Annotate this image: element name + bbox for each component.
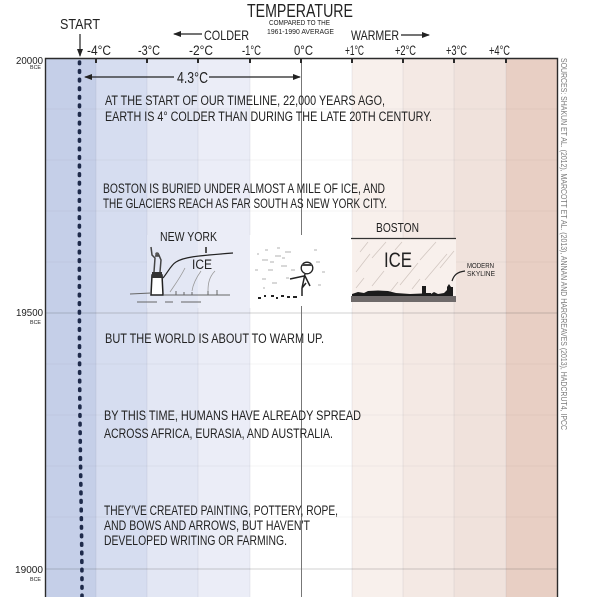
icon: statue of liberty xyxy=(151,247,163,295)
colder label with arrow: COLDER xyxy=(204,27,249,43)
start label with arrow xyxy=(60,16,100,56)
illustration: boston under ice: BOSTON xyxy=(376,220,419,235)
year axis labels: BCE xyxy=(30,320,41,326)
temperature axis labels: +1°C xyxy=(345,43,364,58)
skyline callout: SKYLINE xyxy=(467,269,495,278)
text block: start of timeline: AT THE START OF OUR TIMELINE, 22,000 YEARS AGO, xyxy=(105,93,385,108)
illustration: new york under ice xyxy=(130,229,233,302)
text block: human spread: ACROSS AFRICA, EURASIA, AND AUSTRALIA. xyxy=(104,426,333,441)
sources note: SOURCES: SHAKUN ET AL. (2012), MARCOTT ET AL. (2013), ANNAN AND HARGREAVES (2013), HADCRUT4, IPCC xyxy=(559,58,568,430)
subtitle: 1961-1990 AVERAGE xyxy=(267,29,334,36)
text block: start of timeline: EARTH IS 4° COLDER THAN DURING THE LATE 20TH CENTURY. xyxy=(105,109,432,124)
text block: boston under ice xyxy=(103,181,387,211)
illustration: new york under ice: ICE xyxy=(192,257,212,272)
text block: warming begins: BUT THE WORLD IS ABOUT TO WARM UP. xyxy=(105,331,324,346)
year axis labels: 19000 xyxy=(15,564,43,576)
panel: frame and ticks xyxy=(46,58,558,597)
year axis labels: 20000 xyxy=(16,55,43,67)
title: TEMPERATURE xyxy=(247,1,353,21)
skyline callout: MODERN xyxy=(467,261,494,270)
temperature axis labels: -2°C xyxy=(189,43,213,58)
skyline callout xyxy=(452,261,495,281)
text block: human inventions: DEVELOPED WRITING OR FARMING. xyxy=(104,533,287,548)
illustration: figure walking in snow xyxy=(255,248,325,298)
temperature axis labels: +2°C xyxy=(395,43,416,58)
temperature axis labels: -1°C xyxy=(242,43,261,58)
illustration: boston under ice: ICE xyxy=(384,249,412,272)
year axis labels xyxy=(15,55,43,583)
illustration: new york under ice: NEW YORK xyxy=(160,229,217,244)
temperature axis labels xyxy=(87,43,510,58)
year axis labels: BCE xyxy=(30,65,41,71)
illustration: boston under ice xyxy=(351,220,495,302)
dotted temperature line xyxy=(79,62,82,597)
text block: boston under ice: BOSTON IS BURIED UNDER ALMOST A MILE OF ICE, AND xyxy=(103,181,385,196)
year axis labels: BCE xyxy=(30,577,41,583)
temperature axis labels: +4°C xyxy=(489,43,510,58)
subtitle: COMPARED TO THE xyxy=(269,20,330,27)
temperature axis labels: -3°C xyxy=(138,43,160,58)
colder label with arrow xyxy=(174,27,249,43)
temperature axis labels: -4°C xyxy=(87,43,111,58)
text block: human inventions xyxy=(104,503,338,548)
warmer label with arrow: WARMER xyxy=(351,27,399,43)
panel: temperature columns xyxy=(45,58,557,597)
temperature axis labels: 0°C xyxy=(294,43,313,58)
text block: human spread: BY THIS TIME, HUMANS HAVE ALREADY SPREAD xyxy=(104,408,361,423)
text block: start of timeline xyxy=(105,93,432,124)
skyline ground band xyxy=(351,296,456,302)
text block: human spread xyxy=(104,408,361,441)
year axis labels: 19500 xyxy=(16,307,43,319)
start label with arrow: START xyxy=(60,16,100,33)
text block: human inventions: THEY'VE CREATED PAINTING, POTTERY, ROPE, xyxy=(104,503,338,518)
icon: skyline xyxy=(352,284,453,296)
range arrow: 4.3 degrees: 4.3°C xyxy=(177,70,208,87)
temperature axis labels: +3°C xyxy=(446,43,467,58)
subtitle xyxy=(267,20,334,36)
text block: boston under ice: THE GLACIERS REACH AS FAR SOUTH AS NEW YORK CITY. xyxy=(103,196,387,211)
text block: human inventions: AND BOWS AND ARROWS, BUT HAVEN'T xyxy=(104,518,310,533)
